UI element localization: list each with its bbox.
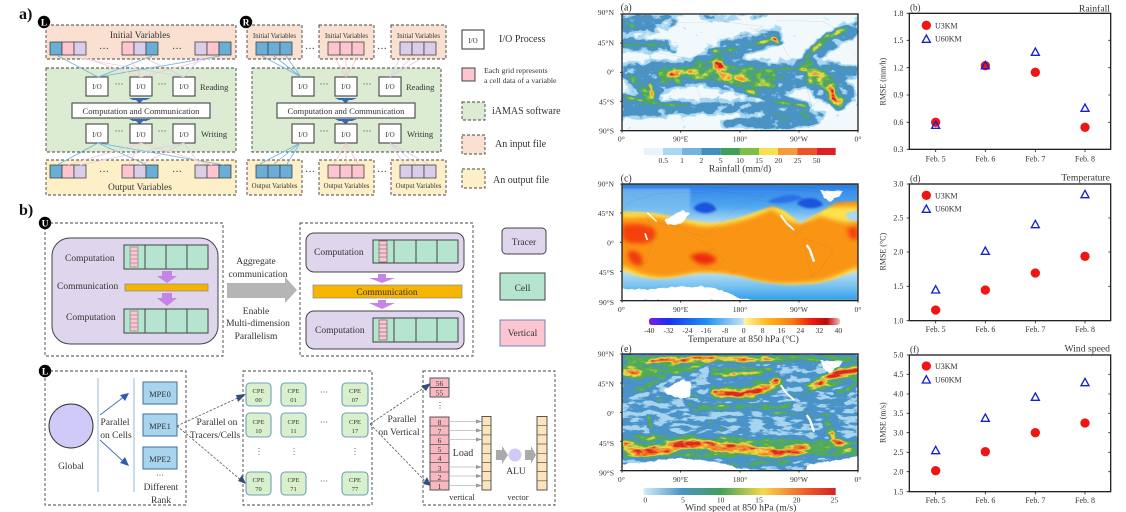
CPE grid: 10	[255, 428, 262, 435]
badge L	[39, 365, 51, 378]
badge L: L	[42, 368, 48, 378]
panel: CPE array	[243, 371, 372, 505]
purple arrow	[369, 274, 395, 283]
arrows: parallel on tracers/cells: Parallel on	[197, 418, 238, 428]
legend (f)	[922, 361, 962, 384]
iAMAS software band: I/O	[179, 83, 189, 91]
rainfall colorbar: 10	[736, 156, 744, 165]
wind colorbar: 10	[717, 495, 725, 504]
legend (d)	[922, 191, 962, 214]
iAMAS software: ···	[320, 79, 328, 89]
panel (a): rainfall map	[598, 3, 861, 175]
legend iAMAS software: iAMAS software	[492, 106, 561, 117]
chart (f): wind speed RMSE: RMSE (m/s)	[878, 402, 887, 443]
iAMAS software band: ···	[114, 79, 124, 89]
iAMAS software band: I/O	[136, 83, 146, 91]
rainfall colorbar: 2	[699, 156, 703, 165]
map axis labels: 180°	[733, 305, 747, 314]
iAMAS software band: I/O	[92, 83, 102, 91]
chart (d): temperature RMSE: Feb. 6	[975, 325, 995, 334]
top computation: Computation	[65, 254, 115, 264]
CPE grid: 11	[290, 428, 297, 435]
iAMAS software: ···	[362, 126, 372, 136]
iAMAS software: I/O	[341, 131, 351, 139]
vertical layers stack: 4	[438, 454, 442, 463]
panel (e): wind speed map	[598, 344, 861, 512]
CPE grid: CPE	[288, 477, 299, 484]
chart (f): wind speed RMSE: 2.0	[893, 467, 903, 476]
map axis labels: 45°S	[599, 439, 614, 448]
chart (d): temperature RMSE: Feb. 8	[1075, 325, 1095, 334]
legend (b): U3KM	[935, 21, 958, 30]
CPE grid: CPE	[288, 388, 299, 395]
vertical layers stack	[430, 378, 449, 491]
chart (b): rainfall RMSE: RMSE (mm/h)	[878, 57, 887, 106]
CPE grid: ···	[320, 418, 328, 427]
iAMAS software band: I/O	[179, 131, 189, 139]
input file band: Initial Variables	[110, 31, 170, 41]
iAMAS software band: Reading	[200, 82, 229, 92]
MPE boxes: MPE2	[149, 454, 171, 464]
section label a): a)	[19, 6, 32, 23]
output file band: ···	[172, 167, 182, 178]
chart (b): rainfall RMSE: 1.8	[893, 9, 903, 18]
panel (c): temperature map	[598, 173, 861, 345]
chart (d): temperature RMSE: 1.5	[893, 282, 903, 291]
arrows: parallel on vertical	[370, 383, 431, 486]
MPE boxes: Different	[144, 482, 179, 493]
MPE boxes	[143, 382, 179, 506]
iAMAS software: ···	[362, 79, 372, 89]
badge L	[38, 16, 50, 28]
chart (f): wind speed RMSE: 3.0	[893, 428, 903, 437]
CPE grid: CPE	[349, 477, 361, 484]
vertical layers stack: 56	[436, 379, 444, 388]
map axis labels: 0°	[855, 305, 861, 314]
panel: left I/O scheme	[38, 16, 236, 195]
chart (b): rainfall RMSE: 1.5	[893, 36, 903, 45]
arrow: aggregate communication	[226, 257, 297, 342]
output file band: ···	[99, 167, 109, 178]
legend I/O process: I/O	[468, 37, 478, 45]
arrows: parallel on tracers/cells	[177, 394, 246, 484]
chart (d): temperature RMSE: 3.0	[893, 180, 903, 189]
input files	[247, 25, 446, 59]
temperature colorbar: -24	[682, 326, 693, 335]
panel (a): rainfall map: (a)	[621, 3, 632, 14]
data flow arrows right	[260, 56, 428, 164]
legend: I/O scheme	[462, 30, 561, 188]
legend output file: An output file	[493, 175, 550, 186]
chart (d): temperature RMSE: Feb. 7	[1025, 325, 1045, 334]
vertical layers stack: 7	[438, 427, 442, 436]
legend (d): U60KM	[935, 205, 962, 214]
iAMAS software band: Computation and Communication	[83, 106, 200, 116]
data points (d)	[931, 190, 1090, 315]
legend (d): U3KM	[935, 191, 958, 200]
CPE grid: CPE	[349, 388, 361, 395]
CPE grid: CPE	[349, 419, 361, 426]
temperature colorbar: 32	[816, 326, 823, 335]
temperature colorbar: -32	[664, 326, 674, 335]
chart (f): wind speed RMSE: 4.0	[893, 390, 903, 399]
arrow: aggregate communication: Parallelism	[235, 332, 278, 342]
vertical layers stack: 6	[438, 436, 442, 445]
map axis labels: 0°	[855, 134, 861, 143]
chart (f): wind speed RMSE: 4.5	[893, 370, 903, 379]
CPE grid: 70	[255, 486, 262, 493]
iAMAS software band: ···	[114, 126, 124, 136]
map axis labels: 45°S	[599, 97, 614, 106]
data flow arrows left	[57, 56, 224, 165]
map axis labels: 180°	[733, 475, 747, 484]
badge L: L	[41, 18, 47, 28]
section label b): b)	[19, 202, 33, 219]
map axis labels: 90°S	[599, 468, 614, 477]
map axis labels: 0°	[618, 134, 625, 143]
vertical layers stack: 55	[436, 388, 444, 398]
bottom computation: Computation	[66, 313, 116, 323]
rainfall colorbar: 25	[794, 156, 802, 165]
chart (b): rainfall RMSE: (b)	[910, 3, 920, 13]
map axis labels: 90°S	[599, 298, 614, 307]
chart (f): wind speed RMSE: Wind speed	[1065, 343, 1110, 354]
vertical layers stack: ⋮	[436, 401, 444, 410]
map axis labels: 90°W	[790, 305, 809, 314]
chart (b): rainfall RMSE: 0.6	[893, 118, 903, 127]
rainfall colorbar	[644, 148, 836, 175]
top computation	[306, 233, 464, 272]
panel: vertical and vector load	[423, 371, 555, 505]
chart (b): rainfall RMSE: Rainfall	[1079, 3, 1110, 14]
legend (b): U60KM	[935, 35, 962, 44]
wind colorbar: 15	[755, 495, 763, 504]
output files: Output Variables	[396, 183, 442, 190]
iAMAS software: I/O	[298, 83, 308, 91]
arrow: aggregate communication: Enable	[243, 307, 269, 317]
map axis labels: 90°E	[673, 305, 689, 314]
legend input file	[462, 135, 547, 154]
CPE grid: 71	[290, 486, 297, 493]
iAMAS software: ···	[320, 126, 328, 136]
chart (d): temperature RMSE: Temperature	[1061, 173, 1110, 184]
vertical layers stack: 3	[438, 464, 442, 473]
purple arrows	[157, 271, 177, 306]
chart (b): rainfall RMSE: 1.2	[893, 63, 903, 72]
global circle: Global	[58, 462, 84, 472]
temperature colorbar: -16	[701, 326, 711, 335]
wind colorbar	[643, 488, 838, 512]
global circle	[49, 404, 93, 472]
rainfall colorbar: 20	[775, 156, 782, 165]
temperature field	[622, 184, 858, 301]
CPE grid: ···	[320, 388, 328, 397]
output files: Output Variables	[252, 183, 298, 190]
temperature colorbar: -40	[644, 326, 655, 335]
top computation: Computation	[314, 248, 364, 258]
CPE grid: ···	[320, 477, 328, 486]
map axis labels: 90°N	[598, 8, 614, 17]
panel: MPE parallel on cells	[39, 365, 186, 506]
chart (f): wind speed RMSE	[878, 343, 1111, 505]
rainfall colorbar: Rainfall (mm/d)	[709, 164, 771, 175]
input file band	[46, 25, 236, 59]
map axis labels: 0°	[618, 305, 625, 314]
chart (b): rainfall RMSE: Feb. 5	[926, 154, 946, 163]
legend vertical: Vertical	[508, 329, 538, 339]
CPE grid: 01	[290, 397, 297, 404]
load arrows: Load	[453, 448, 473, 459]
panel (e): wind speed map: (e)	[621, 344, 632, 355]
wind colorbar: 25	[831, 495, 838, 504]
vertical layers stack: 2	[438, 473, 442, 482]
chart (b): rainfall RMSE: Feb. 6	[975, 154, 995, 163]
purple arrow	[369, 300, 395, 309]
rainfall colorbar: 15	[755, 156, 763, 165]
chart (b): rainfall RMSE: 0.9	[893, 91, 903, 100]
panel: unaggregated communication	[39, 217, 223, 356]
legend grid cell: Each grid represents	[484, 66, 548, 75]
communication bar	[57, 282, 208, 292]
CPE grid: CPE	[253, 388, 264, 395]
badge R	[240, 16, 252, 28]
temperature colorbar: -8	[722, 326, 728, 335]
legend grid cell	[462, 66, 557, 85]
rainfall colorbar: 5	[719, 156, 723, 165]
rainfall colorbar: 0.5	[659, 156, 668, 165]
temperature colorbar: Temperature at 850 hPa (°C)	[688, 334, 799, 345]
iAMAS software: Writing	[407, 129, 434, 139]
panel (c): temperature map: (c)	[621, 173, 632, 184]
iAMAS software: Reading	[406, 82, 435, 92]
wind colorbar: 20	[793, 495, 801, 504]
bottom computation	[306, 311, 464, 349]
rainfall colorbar: 50	[813, 156, 821, 165]
temperature colorbar: 24	[797, 326, 804, 335]
legend (f): U3KM	[935, 362, 958, 371]
vertical buffer: vertical	[449, 492, 475, 502]
map axis labels: 0°	[607, 238, 614, 247]
chart (d): temperature RMSE: 1.0	[893, 316, 903, 325]
vertical layers stack: 5	[438, 445, 442, 454]
vertical layers stack: 8	[438, 418, 442, 427]
chart (f): wind speed RMSE: 1.5	[893, 487, 903, 496]
map axis labels	[598, 350, 861, 484]
map axis labels: 0°	[607, 409, 614, 418]
iAMAS software: I/O	[385, 83, 395, 91]
map axis labels	[598, 8, 861, 143]
chart (f): wind speed RMSE: Feb. 6	[975, 496, 995, 505]
input file band: ···	[172, 44, 182, 55]
map axis labels: 90°N	[598, 180, 614, 189]
input files: Initial Variables	[325, 33, 368, 40]
vertical layers stack: 1	[438, 482, 442, 491]
rainfall field	[622, 14, 858, 131]
CPE grid: CPE	[253, 477, 264, 484]
temperature colorbar: 0	[742, 326, 746, 335]
communication bar: Communication	[356, 288, 418, 298]
input file band: ···	[99, 44, 109, 55]
chart (f): wind speed RMSE: 3.5	[893, 409, 903, 418]
output files	[247, 160, 446, 195]
iAMAS software band	[46, 68, 236, 152]
CPE grid: 07	[352, 397, 359, 404]
data points (b)	[931, 48, 1090, 132]
arrows: parallel on vertical: on Vertical	[378, 428, 420, 438]
chart (f): wind speed RMSE: Feb. 8	[1075, 496, 1095, 505]
map axis labels: 180°	[733, 134, 747, 143]
chart (f): wind speed RMSE: 5.0	[893, 351, 903, 360]
chart (d): temperature RMSE: 2.5	[893, 214, 903, 223]
temperature colorbar: 16	[778, 326, 785, 335]
legend input file: An input file	[495, 139, 547, 150]
arrow: aggregate communication: Aggregate	[236, 257, 276, 267]
chart (d): temperature RMSE	[878, 173, 1111, 334]
chart (b): rainfall RMSE: Feb. 8	[1075, 154, 1095, 163]
map axis labels: 0°	[618, 475, 625, 484]
wind field	[622, 354, 858, 471]
legend I/O process: I/O Process	[499, 34, 545, 45]
output file band: Output Variables	[108, 183, 172, 193]
iAMAS software	[252, 68, 441, 152]
ALU: ALU	[506, 467, 526, 477]
legend I/O process	[462, 30, 545, 49]
input files: Initial Variables	[397, 33, 440, 40]
parallel on cells arrows: Parallel	[100, 418, 130, 428]
rainfall colorbar: 1	[680, 156, 684, 165]
map axis labels: 45°S	[599, 268, 614, 277]
MPE boxes: MPE0	[149, 389, 171, 399]
map axis labels: 90°N	[598, 350, 614, 359]
bottom computation: Computation	[315, 326, 365, 336]
iAMAS software band: Writing	[201, 129, 228, 139]
arrow: aggregate communication: Multi-dimension	[226, 319, 290, 329]
map axis labels: 90°E	[673, 134, 689, 143]
map axis labels: 90°S	[599, 127, 614, 136]
CPE grid: CPE	[253, 419, 264, 426]
CPE grid: CPE	[288, 419, 299, 426]
wind colorbar: 0	[643, 495, 647, 504]
output files: ···	[377, 167, 387, 178]
MPE boxes: Rank	[151, 496, 171, 506]
map axis labels: 0°	[607, 68, 614, 77]
parallel on cells arrows: on Cells	[100, 431, 132, 441]
map axis labels: 90°W	[790, 475, 809, 484]
CPE grid: 77	[352, 486, 359, 493]
chart (b): rainfall RMSE: 0.3	[893, 145, 903, 154]
chart (f): wind speed RMSE: (f)	[910, 344, 919, 354]
iAMAS software band: I/O	[92, 131, 102, 139]
iAMAS software: I/O	[341, 83, 351, 91]
chart (d): temperature RMSE: Feb. 5	[926, 325, 946, 334]
chart (d): temperature RMSE: 2.0	[893, 248, 903, 257]
bottom computation	[66, 309, 208, 333]
output file band	[46, 160, 236, 195]
CPE grid: 17	[352, 428, 359, 435]
iAMAS software: Computation and Communication	[288, 106, 405, 116]
temperature colorbar: 8	[761, 326, 765, 335]
iAMAS software band: ···	[158, 126, 166, 136]
temperature colorbar: 40	[835, 326, 842, 335]
MPE boxes: MPE1	[149, 421, 171, 431]
map axis labels: 45°N	[598, 380, 614, 389]
chart (f): wind speed RMSE: Feb. 7	[1025, 496, 1045, 505]
arrows: parallel on tracers/cells: Tracers/Cells	[190, 431, 240, 441]
iAMAS software band: ···	[158, 79, 166, 89]
legend cell: Cell	[515, 284, 531, 294]
legend (b)	[922, 21, 962, 44]
communication bar	[313, 285, 462, 298]
input files: Initial Variables	[253, 33, 296, 40]
input files: ···	[305, 44, 315, 55]
data points (f)	[931, 378, 1090, 475]
iAMAS software: I/O	[298, 131, 308, 139]
legend iAMAS software	[462, 102, 561, 120]
CPE grid	[246, 383, 368, 495]
arrows: parallel on vertical: Parallel	[387, 415, 417, 425]
badge U: U	[42, 220, 49, 230]
panel: aggregated communication	[300, 223, 473, 356]
temperature colorbar	[644, 318, 842, 345]
badge R: R	[243, 18, 250, 28]
legend (f): U60KM	[935, 375, 962, 384]
chart (d): temperature RMSE: RMSE (°C)	[878, 233, 887, 270]
panel: right I/O scheme	[240, 16, 446, 195]
chart (b): rainfall RMSE	[878, 3, 1111, 163]
arrow: aggregate communication: communication	[228, 270, 288, 280]
communication bar: Communication	[57, 282, 118, 292]
map axis labels: 45°N	[598, 209, 614, 218]
CPE grid: 00	[255, 397, 262, 404]
vector buffer: vector	[507, 492, 529, 502]
badge U	[39, 217, 51, 230]
top computation	[65, 245, 208, 269]
iAMAS software band: I/O	[136, 131, 146, 139]
parallel on cells arrows	[100, 393, 132, 466]
legend tracer: Tracer	[512, 238, 537, 248]
chart (f): wind speed RMSE: Feb. 5	[926, 496, 946, 505]
output files: ···	[305, 167, 315, 178]
output files: Output Variables	[324, 183, 370, 190]
legend: tracer cell vertical	[500, 228, 546, 346]
legend output file	[462, 169, 550, 188]
map axis labels: 45°N	[598, 38, 614, 47]
wind colorbar: 5	[681, 495, 685, 504]
chart (f): wind speed RMSE: 2.5	[893, 448, 903, 457]
chart (d): temperature RMSE: (d)	[910, 173, 920, 183]
legend grid cell: a cell data of a variable	[484, 76, 557, 85]
map axis labels	[598, 180, 861, 314]
map axis labels: 0°	[855, 475, 861, 484]
map axis labels: 90°E	[673, 475, 689, 484]
iAMAS software: I/O	[385, 131, 395, 139]
MPE boxes: ···	[156, 471, 164, 480]
map axis labels: 90°W	[790, 134, 809, 143]
input files: ···	[377, 44, 387, 55]
chart (b): rainfall RMSE: Feb. 7	[1025, 154, 1045, 163]
